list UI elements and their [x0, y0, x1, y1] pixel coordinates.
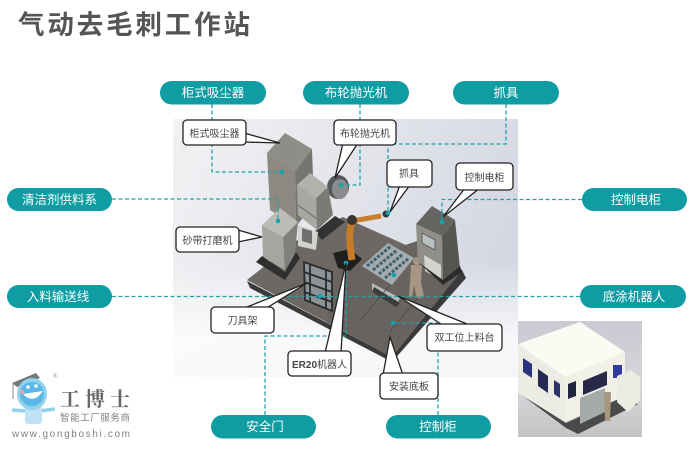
callout: 布轮抛光机: [334, 120, 396, 178]
pill: 底涂机器人: 底涂机器人: [603, 289, 666, 304]
callout: 柜式吸尘器: [183, 120, 280, 145]
tool rack: [304, 262, 332, 311]
panel: equipment render background: [173, 119, 518, 377]
plate seams: [359, 285, 419, 331]
pill: 控制柜: 控制柜: [419, 420, 457, 434]
callout: 安装底板: 安装底板: [389, 380, 429, 393]
logo: 工博士: 工博士: [60, 387, 130, 411]
callout: ER20机器人: ER20机器人: [292, 358, 347, 371]
callout: 刀具架: 刀具架: [228, 315, 258, 327]
base plate: [247, 217, 466, 362]
callout: 安装底板: [380, 337, 438, 399]
callout: 双工位上料台: [398, 296, 502, 351]
pill: 清洁剂供料系: 清洁剂供料系: [22, 192, 97, 207]
icon: mascot: [12, 373, 55, 424]
logo: 工博士: [11, 373, 130, 440]
robot arm: [333, 210, 390, 271]
pill: 安全门: 安全门: [246, 419, 284, 434]
cabinet vacuum: [267, 133, 314, 226]
belt sander: [256, 208, 318, 280]
callout: 控制电柜: [443, 163, 513, 217]
callout: 控制电柜: 控制电柜: [464, 171, 504, 184]
callout: ER20机器人: [288, 263, 351, 376]
pill: 安全门: [211, 415, 316, 438]
callout: 刀具架: [211, 283, 307, 333]
callout: 布轮抛光机: 布轮抛光机: [340, 127, 390, 140]
polishing machine: [297, 173, 349, 240]
pill: 柜式吸尘器: [160, 81, 266, 104]
logo: 工博士: 智能工厂服务商: [60, 412, 130, 424]
callout: 砂带打磨机: [176, 227, 262, 252]
control cabinet: [416, 206, 462, 285]
operator: [409, 257, 424, 299]
callout: 抓具: [387, 160, 432, 212]
pill: 柜式吸尘器: 柜式吸尘器: [182, 86, 245, 100]
pill: 入料输送线: 入料输送线: [27, 289, 90, 304]
pill: 控制电柜: [582, 188, 687, 211]
callout: 柜式吸尘器: 柜式吸尘器: [190, 127, 240, 140]
pill: 底涂机器人: [580, 285, 686, 308]
pill: 抓具: 抓具: [493, 86, 519, 100]
logo: 工博士: www.gongboshi.com: [11, 429, 130, 440]
pill: 抓具: [453, 81, 559, 104]
pill: 控制电柜: 控制电柜: [611, 193, 661, 207]
inset: enclosed workstation render: [518, 321, 642, 437]
logo: 工博士: ®: [53, 373, 58, 380]
connector dots: [276, 170, 444, 325]
pill: 控制柜: [386, 415, 491, 438]
callout: 抓具: 抓具: [399, 167, 419, 180]
loading table: [362, 243, 414, 307]
pill: 清洁剂供料系: [7, 188, 112, 211]
callout: 双工位上料台: 双工位上料台: [434, 331, 494, 344]
title: 气动去毛刺工作站: [18, 10, 250, 40]
illustration: workstation: [247, 133, 466, 362]
dashed connector lines: [112, 104, 582, 415]
pill: 布轮抛光机: [303, 81, 409, 104]
pill: 入料输送线: [7, 285, 112, 308]
callout: 砂带打磨机: 砂带打磨机: [182, 234, 232, 247]
pill: 布轮抛光机: 布轮抛光机: [325, 85, 388, 100]
